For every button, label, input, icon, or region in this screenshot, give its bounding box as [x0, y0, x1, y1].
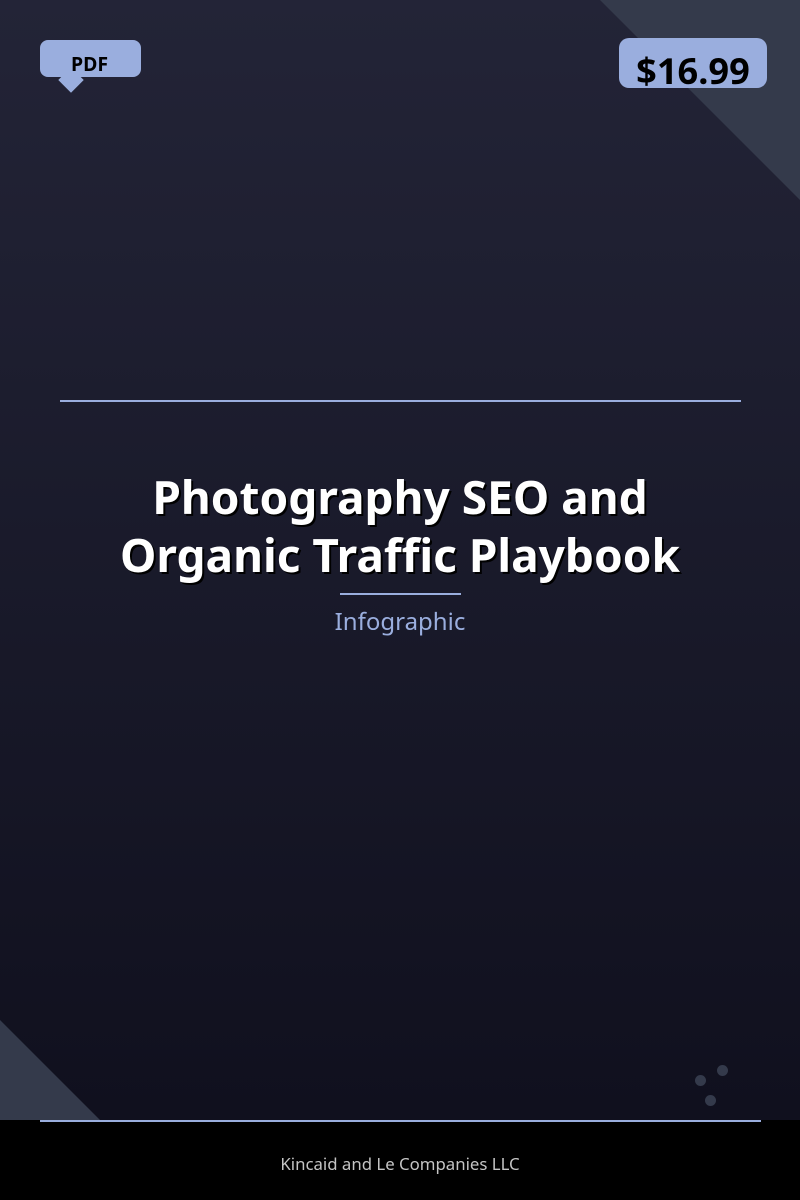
- corner triangle: top right: [600, 0, 800, 200]
- divider: title underline: [340, 593, 461, 595]
- price label: $16.99: [636, 44, 750, 94]
- footer text: Kincaid and Le Companies LLC: [280, 1152, 520, 1175]
- title: [120, 466, 682, 586]
- title: Photography SEO and: [152, 466, 648, 528]
- decorative dots: [695, 1065, 728, 1106]
- footer bar: [0, 1120, 800, 1200]
- corner triangle: bottom left: [0, 1020, 100, 1120]
- badge pointer: [58, 67, 83, 93]
- badge: PDF: [40, 40, 141, 93]
- badge body: [40, 40, 141, 77]
- badge: price: [619, 38, 767, 88]
- title: Organic Traffic Playbook: [120, 524, 680, 586]
- footer rule: [40, 1120, 761, 1122]
- divider: top rule: [60, 400, 741, 402]
- badge label: PDF: [71, 50, 108, 77]
- subtitle: Infographic: [335, 604, 465, 638]
